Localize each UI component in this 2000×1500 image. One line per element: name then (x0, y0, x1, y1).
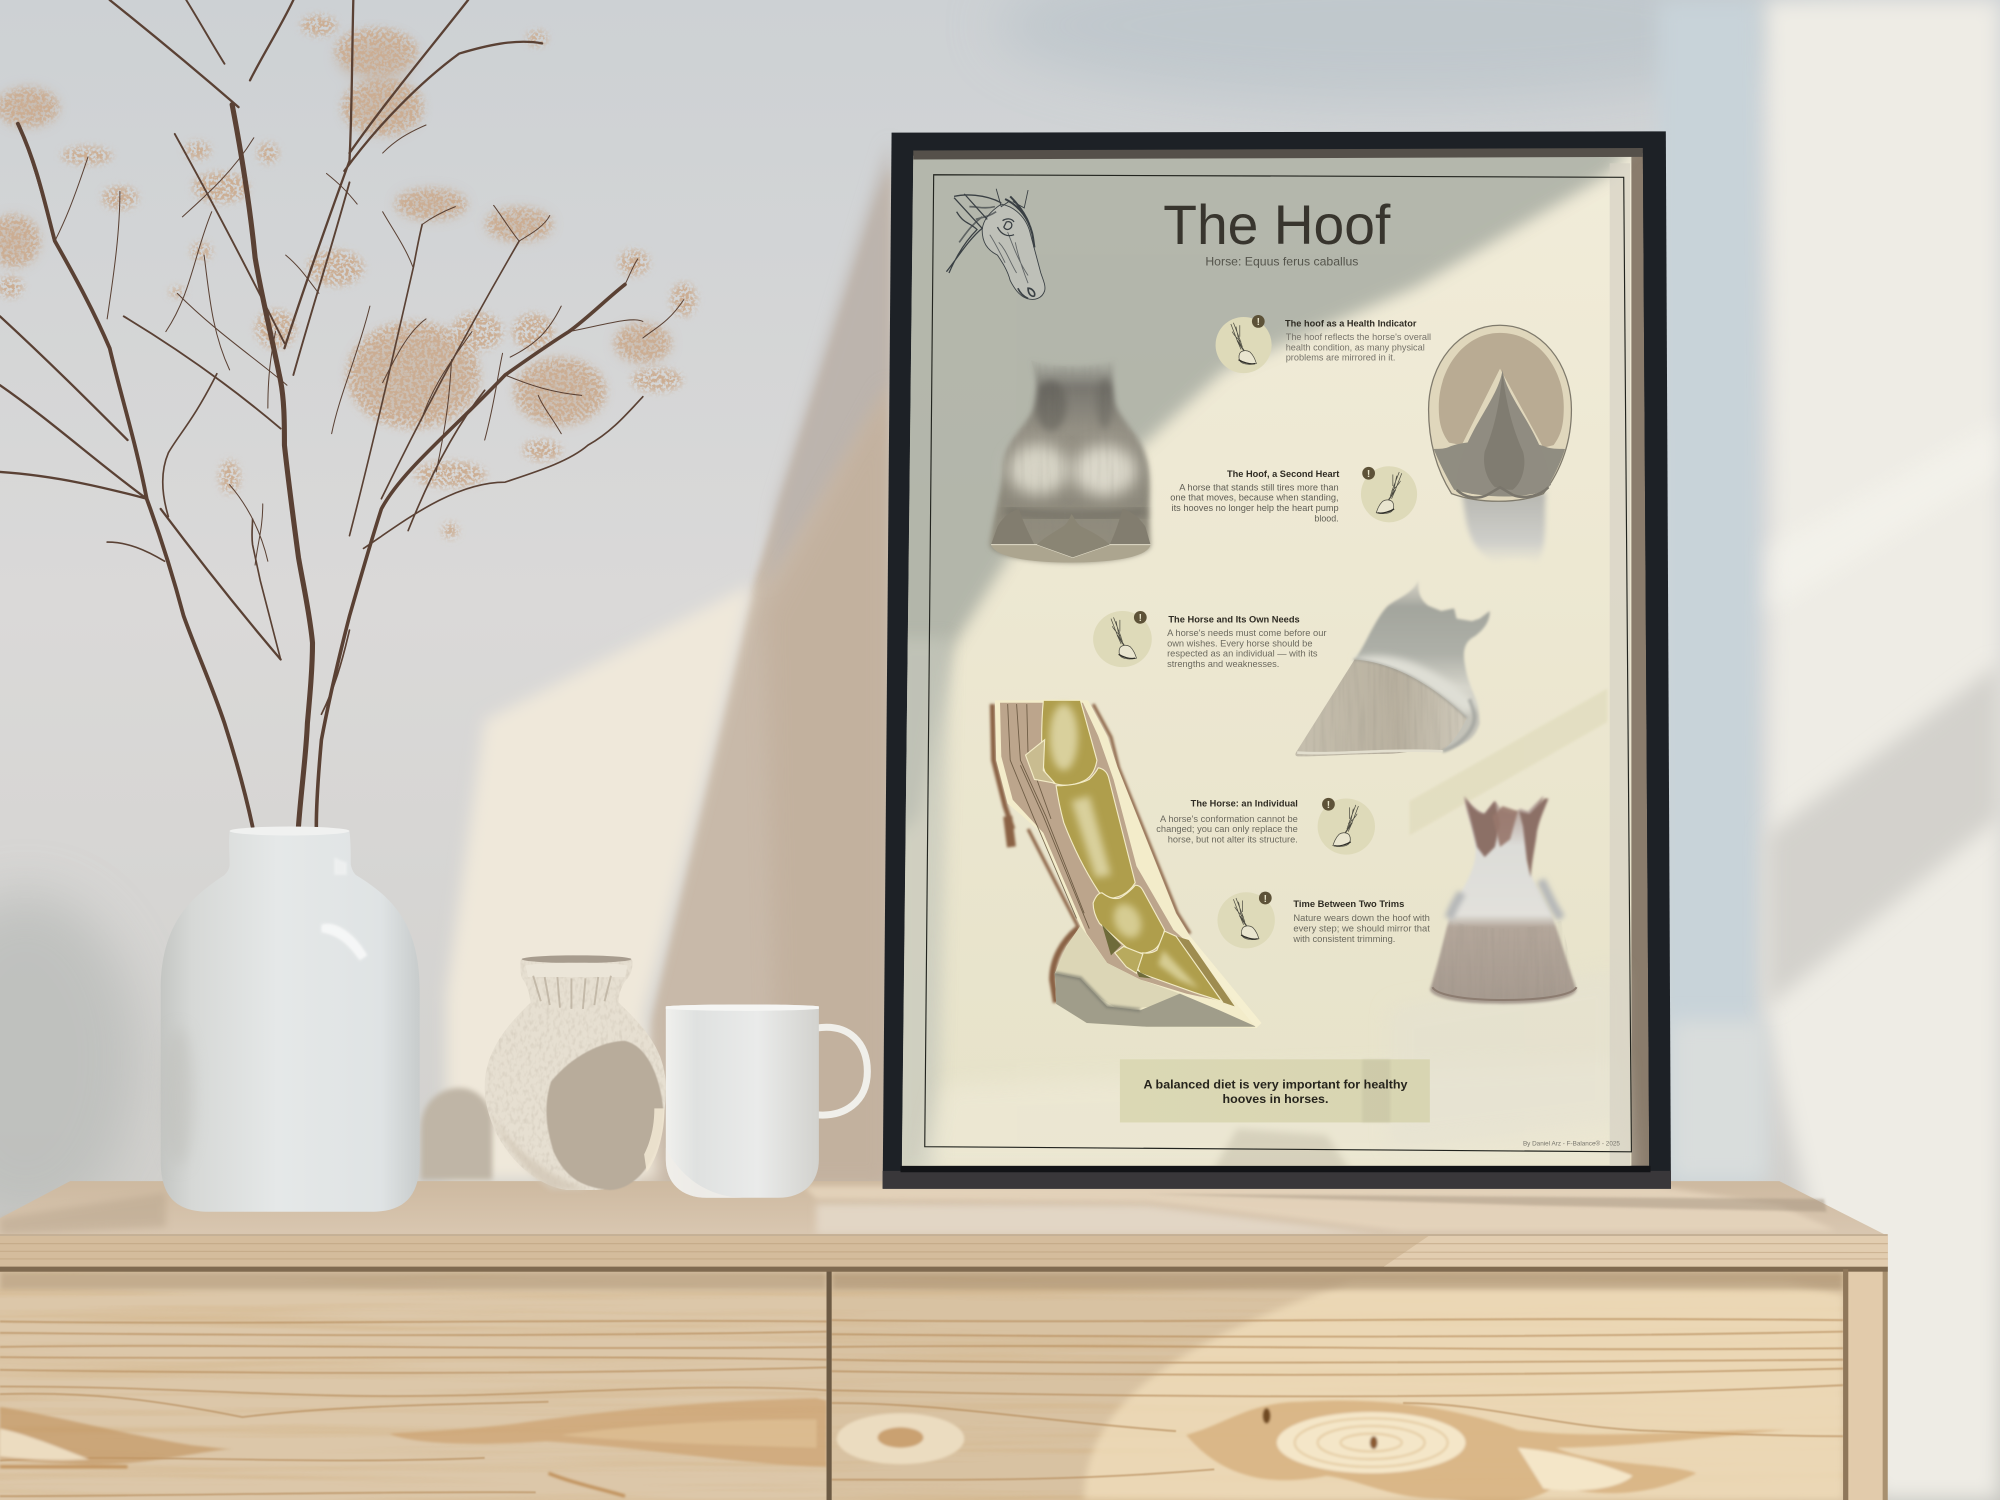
icon: hoof 2: ! (1367, 469, 1370, 480)
fur outlines (992, 704, 1190, 1003)
tip 2: second heart (1170, 466, 1417, 523)
body 1: health condition, as many physical (1286, 342, 1425, 352)
vase shadow shape (546, 1041, 663, 1190)
body 1 (1286, 332, 1431, 363)
body 5: with consistent trimming. (1292, 934, 1395, 944)
icon: hoof 4: ! (1327, 800, 1330, 811)
callout banner: hooves in horses. (1223, 1092, 1328, 1106)
grain lines (0, 1319, 1843, 1496)
frame (883, 128, 1671, 1189)
icon: hoof 3 (1093, 611, 1152, 667)
shadow across upper left (893, 128, 1645, 842)
vase shading (163, 1027, 194, 1167)
stems (0, 0, 684, 827)
poster border line (925, 175, 1631, 1152)
hoof wall strip (1254, 1026, 1256, 1027)
body 2: A horse that stands still tires more than (1179, 482, 1339, 492)
body 2 (1170, 482, 1339, 523)
big white vase (161, 827, 420, 1212)
horse head sketch (946, 189, 1045, 299)
body 3: own wishes. Every horse should be (1167, 638, 1313, 648)
body 5: Nature wears down the hoof with (1293, 913, 1430, 923)
icon: hoof 3: ! (1139, 613, 1142, 624)
heading 4: The Horse: an Individual (1191, 799, 1298, 809)
tip 4: an individual (1156, 798, 1375, 855)
body 3 (1167, 628, 1327, 669)
body 3: strengths and weaknesses. (1167, 659, 1279, 669)
body 4 (1156, 814, 1298, 844)
icon: hoof 5 (1217, 892, 1275, 948)
front edge (0, 1236, 1888, 1267)
frog and sole (1055, 973, 1256, 1027)
icon: hoof 1 (1216, 315, 1272, 373)
tip 3: own needs (1093, 611, 1327, 669)
white mug (666, 1004, 867, 1198)
body 5: every step; we should mirror that (1293, 924, 1430, 934)
right drawer (832, 1272, 1843, 1500)
sun patch on drawer (1084, 1282, 1843, 1500)
hoof back view illustration (990, 360, 1151, 562)
hoof section illustration (992, 700, 1261, 1028)
right knots (837, 1400, 1786, 1500)
body 3: A horse's needs must come before our (1167, 628, 1327, 638)
blossom haze (0, 34, 668, 422)
lower shade (489, 1110, 589, 1190)
credit: By Daniel Arz - F-Balance® - 2025 (1523, 1140, 1621, 1147)
left knots (0, 1398, 827, 1496)
frame top shadow strip (913, 148, 1643, 159)
body 1: The hoof reflects the horse's overall (1286, 332, 1431, 342)
tip 1: health indicator (1216, 315, 1431, 373)
sideboard (0, 1181, 1888, 1500)
body 2: one that moves, because when standing, (1170, 493, 1339, 503)
body 4: horse, but not alter its structure. (1168, 834, 1298, 844)
body 1: problems are mirrored in it. (1286, 353, 1395, 363)
body 4: A horse's conformation cannot be (1160, 814, 1298, 824)
heading 3: The Horse and Its Own Needs (1168, 614, 1300, 624)
heading 5: Time Between Two Trims (1293, 899, 1404, 909)
callout banner (1120, 1059, 1430, 1122)
dark gaps (827, 1269, 832, 1500)
icon: hoof 1: ! (1257, 317, 1260, 328)
mug handle (816, 1027, 867, 1115)
hoof front view illustration (1430, 796, 1577, 1004)
tip 5: trims (1217, 892, 1430, 948)
digital cushion (1055, 926, 1180, 1010)
icon: hoof 4 (1318, 798, 1375, 855)
icon: hoof 2 (1361, 466, 1417, 522)
dried blossoms (0, 15, 696, 538)
heading 2: The Hoof, a Second Heart (1227, 469, 1339, 479)
top surface (0, 1181, 1888, 1236)
left drawer (0, 1272, 827, 1500)
body 2: blood. (1314, 513, 1339, 523)
subtitle: Horse: Equus ferus caballus (1205, 254, 1358, 268)
branches (0, 0, 696, 827)
hoof side view illustration (1295, 580, 1490, 756)
title: The Hoof (1163, 194, 1391, 256)
callout banner: A balanced diet is very important for healthy (1143, 1078, 1408, 1092)
cream shell (995, 700, 1261, 1028)
poster (893, 128, 1649, 1173)
right post (1848, 1269, 1883, 1500)
hoof sole illustration (1429, 325, 1571, 562)
heading 1: The hoof as a Health Indicator (1285, 319, 1417, 329)
light patch on wall (421, 140, 890, 1186)
icon: hoof 5: ! (1264, 894, 1267, 905)
vase shadow (421, 1088, 492, 1180)
tendon band (1000, 703, 1222, 1001)
drawer shadow bands (0, 1272, 827, 1290)
body 4: changed; you can only replace the (1156, 824, 1298, 834)
bones (1026, 700, 1222, 1001)
body 2: its hooves no longer help the heart pump (1172, 503, 1339, 513)
body 5 (1292, 913, 1430, 944)
body 3: respected as an individual — with its (1167, 649, 1318, 659)
small textured vase (485, 955, 666, 1190)
